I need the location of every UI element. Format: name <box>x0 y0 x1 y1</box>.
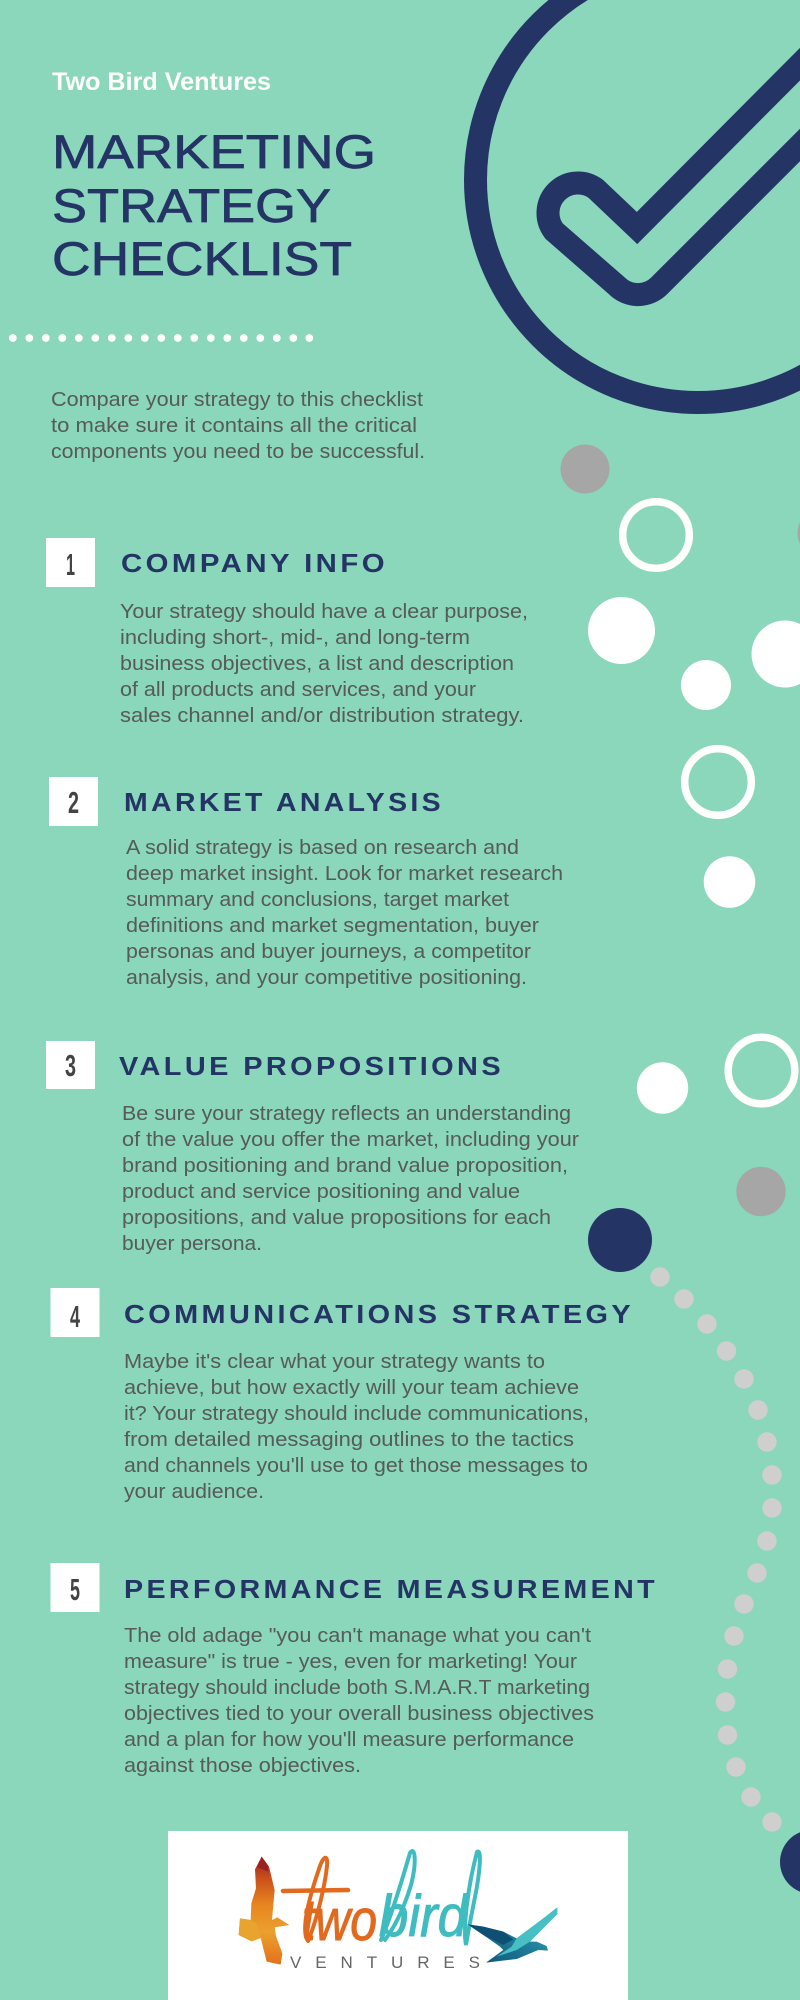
body: company info: Your strategy should have a clear purpose, <box>120 600 528 623</box>
panel: value propositions <box>46 1041 579 1255</box>
icon: large checkmark in circle <box>476 0 800 402</box>
heading: company info: COMPANY INFO <box>121 550 388 578</box>
body: company info: including short-, mid-, and long-term <box>120 626 470 649</box>
title: MARKETING <box>52 125 376 178</box>
body: performance measurement: measure" is true - yes, even for marketing! Your <box>124 1650 577 1673</box>
number badge 5 <box>50 1563 100 1612</box>
icon: orange bird <box>239 1857 289 1965</box>
body: communications strategy: it? Your strategy should include communications, <box>124 1402 589 1425</box>
logo word: bird: bird <box>379 1884 469 1949</box>
number badge 2: 2 <box>68 785 79 820</box>
number badge 4 <box>50 1288 100 1337</box>
title: STRATEGY <box>52 179 331 232</box>
panel: communications strategy <box>50 1288 634 1503</box>
heading: market analysis: MARKET ANALYSIS <box>124 789 444 817</box>
body: performance measurement: The old adage "you can't manage what you can't <box>124 1624 591 1647</box>
decorative circles <box>560 444 800 1894</box>
intro text <box>51 388 425 463</box>
body: value propositions: product and service positioning and value <box>122 1180 520 1203</box>
logo subtitle: VENTURES <box>290 1953 480 1972</box>
body: communications strategy: achieve, but how exactly will your team achieve <box>124 1376 579 1399</box>
number badge 1: 1 <box>66 547 75 582</box>
panel: market analysis <box>49 777 563 989</box>
body: market analysis: definitions and market segmentation, buyer <box>126 914 539 937</box>
body: performance measurement: and a plan for how you'll measure performance <box>124 1728 574 1751</box>
body: communications strategy: Maybe it's clear what your strategy wants to <box>124 1350 545 1373</box>
panel: logo <box>168 1831 628 2000</box>
body: company info: of all products and services, and your <box>120 678 476 701</box>
panel: company info <box>46 538 528 727</box>
body: market analysis: A solid strategy is based on research and <box>126 836 519 859</box>
body: communications strategy: from detailed messaging outlines to the tactics <box>124 1428 574 1451</box>
body: value propositions: buyer persona. <box>122 1232 262 1255</box>
body: value propositions: brand positioning and brand value proposition, <box>122 1154 568 1177</box>
body: performance measurement <box>124 1624 594 1777</box>
body: value propositions: of the value you offer the market, including your <box>122 1128 579 1151</box>
title: CHECKLIST <box>52 232 352 285</box>
number badge 4: 4 <box>70 1299 80 1334</box>
brand name: Two Bird Ventures <box>52 68 271 96</box>
body: performance measurement: strategy should include both S.M.A.R.T marketing <box>124 1676 590 1699</box>
body: market analysis: personas and buyer journeys, a competitor <box>126 940 531 963</box>
body: market analysis <box>126 836 563 989</box>
icon: teal bird <box>468 1907 557 1963</box>
body: communications strategy: your audience. <box>124 1480 264 1503</box>
heading: performance measurement: PERFORMANCE MEASUREMENT <box>124 1576 658 1604</box>
logo word: two <box>283 1858 377 1953</box>
number badge 5: 5 <box>70 1572 80 1607</box>
number badge 3 <box>46 1041 95 1089</box>
heading: value propositions: VALUE PROPOSITIONS <box>119 1053 504 1081</box>
intro text: Compare your strategy to this checklist <box>51 388 423 411</box>
body: company info: business objectives, a list and description <box>120 652 514 675</box>
number badge 1 <box>46 538 95 587</box>
body: company info <box>120 600 528 727</box>
body: market analysis: summary and conclusions, target market <box>126 888 509 911</box>
body: communications strategy: and channels you'll use to get those messages to <box>124 1454 588 1477</box>
title <box>52 125 376 285</box>
body: performance measurement: objectives tied to your overall business objectives <box>124 1702 594 1725</box>
body: company info: sales channel and/or distribution strategy. <box>120 704 524 727</box>
number badge 3: 3 <box>65 1048 76 1083</box>
logo word: bird <box>379 1851 480 1949</box>
logo word: two: two <box>302 1888 377 1953</box>
dotted divider <box>9 334 313 342</box>
intro text: components you need to be successful. <box>51 440 425 463</box>
body: value propositions: propositions, and value propositions for each <box>122 1206 551 1229</box>
heading: communications strategy: COMMUNICATIONS STRATEGY <box>124 1301 634 1329</box>
body: market analysis: deep market insight. Look for market research <box>126 862 563 885</box>
panel: performance measurement <box>50 1563 658 1777</box>
body: value propositions: Be sure your strategy reflects an understanding <box>122 1102 571 1125</box>
body: value propositions <box>122 1102 579 1255</box>
dotted arc <box>650 1267 782 1832</box>
body: performance measurement: against those objectives. <box>124 1754 361 1777</box>
body: market analysis: analysis, and your competitive positioning. <box>126 966 527 989</box>
body: communications strategy <box>124 1350 589 1503</box>
number badge 2 <box>49 777 98 826</box>
intro text: to make sure it contains all the critical <box>51 414 417 437</box>
